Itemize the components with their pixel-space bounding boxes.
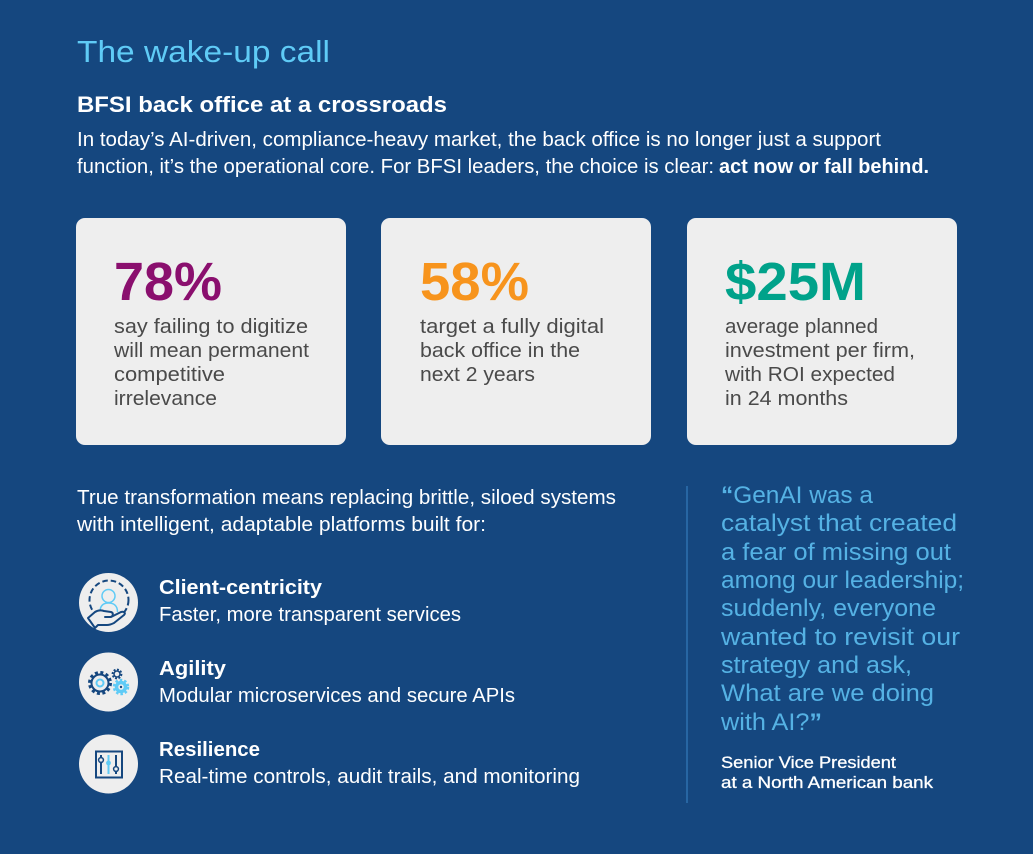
quote attribution: Senior Vice President [721,754,896,772]
item: client-centricity: Faster, more transparent services [159,604,461,626]
quote: “GenAI was a [721,482,874,509]
item: agility: Modular microservices and secure APIs [159,685,515,707]
quote: wanted to revisit our [720,624,960,651]
transformation text: True transformation means replacing brittle, siloed systems [77,487,616,509]
stat description: target a fully digital [420,316,604,338]
quote: strategy and ask, [721,652,912,679]
item: client-centricity: Client-centricity [159,577,323,599]
intro paragraph: In today’s AI-driven, compliance-heavy market, the back office is no longer just a support [77,129,881,151]
stat description: say failing to digitize [114,316,308,338]
quote: catalyst that created [721,510,957,537]
intro paragraph [77,129,929,178]
intro paragraph: function, it’s the operational core. For BFSI leaders, the choice is clear: [77,156,714,178]
icon: control sliders [79,734,138,794]
quote: among our leadership; [721,567,964,594]
quote: with AI?” [720,709,822,736]
panel: stat 78% [76,218,346,445]
transformation text [76,487,616,536]
quote: a fear of missing out [721,539,951,566]
item: resilience [159,739,580,788]
stat number 78%: 78% [114,252,222,312]
stat description: average planned [725,316,878,338]
panel: stat 58% [381,218,651,445]
heading: BFSI back office: BFSI back office at a crossroads [77,92,447,117]
item: client-centricity [159,577,461,626]
stat description: in 24 months [725,388,848,410]
stat number 58%: 58% [420,252,529,312]
item: resilience: Real-time controls, audit trails, and monitoring [159,766,580,788]
stat description: competitive [114,364,225,386]
icon: hand holding person [79,573,138,632]
quote attribution [721,754,934,792]
stat description [724,316,915,410]
item: agility: Agility [159,658,227,680]
stat number $25M: $25M [725,252,866,312]
stat description: back office in the [420,340,580,362]
title: The wake-up call [77,34,330,69]
stat description [420,316,604,386]
quote attribution: at a North American bank [721,774,934,792]
quote: What are we doing [721,680,934,707]
icon: gears [79,652,138,712]
stat description: investment per firm, [725,340,915,362]
panel: stat $25M [687,218,957,445]
quote: suddenly, everyone [721,595,936,622]
transformation text: with intelligent, adaptable platforms built for: [76,514,486,536]
intro paragraph: act now or fall behind. [719,156,929,178]
stat description: will mean permanent [113,340,309,362]
stat description: irrelevance [114,388,217,410]
item: resilience: Resilience [159,739,260,761]
item: agility [159,658,515,707]
quote [720,482,964,736]
stat description [113,316,309,410]
stat description: with ROI expected [724,364,895,386]
stat description: next 2 years [420,364,535,386]
